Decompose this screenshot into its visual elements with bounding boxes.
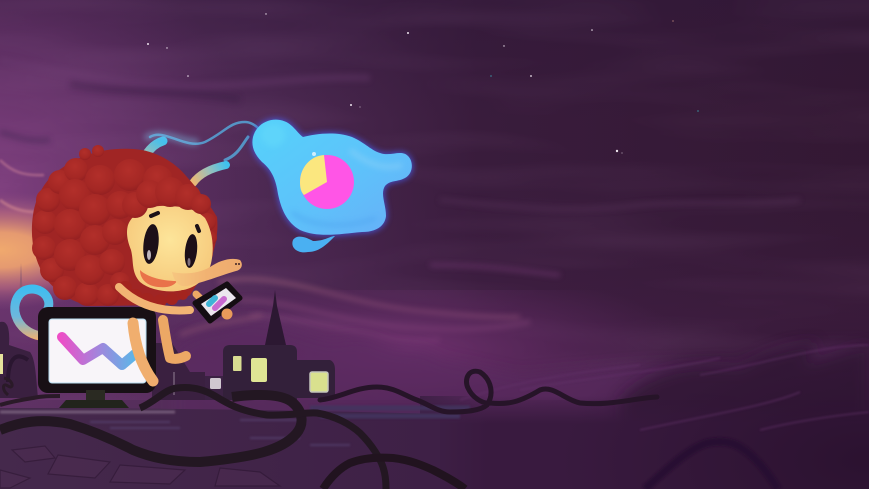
eyes [141, 223, 199, 269]
blob with pie chart [252, 120, 412, 252]
line chart [62, 337, 135, 365]
pie chart [300, 152, 354, 209]
distant hills [0, 290, 869, 440]
beard [118, 281, 188, 308]
tendrils to blob [148, 122, 258, 160]
building cluster with tower [152, 290, 335, 400]
hand [222, 308, 232, 320]
front arm [119, 287, 190, 310]
face [127, 206, 213, 291]
city silhouette left [0, 263, 38, 398]
blob glow [252, 120, 412, 235]
front leg [133, 323, 153, 381]
tail [15, 289, 49, 336]
back leg [163, 320, 186, 359]
mouth [140, 270, 177, 287]
far cable with loop [320, 371, 657, 412]
blob drip [292, 236, 335, 252]
ground [0, 300, 869, 489]
monitor [38, 307, 156, 408]
foreground cables [0, 378, 778, 489]
tablet [195, 284, 240, 321]
blob body [252, 120, 412, 235]
brows [151, 213, 199, 231]
hair [32, 145, 217, 306]
fringe [122, 177, 211, 218]
creature [32, 141, 242, 381]
nose [172, 259, 242, 286]
monitor screen [49, 319, 146, 383]
stars [147, 13, 699, 153]
blob highlights [261, 124, 285, 147]
antennae [140, 141, 226, 183]
